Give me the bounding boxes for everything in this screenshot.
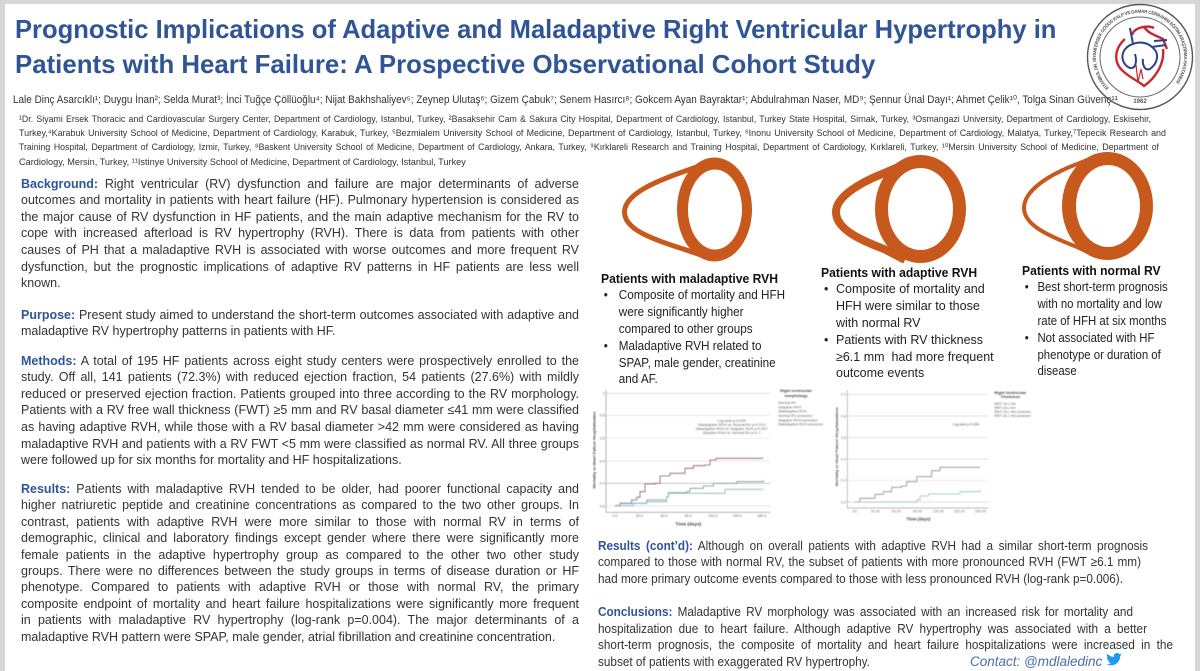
chart: RV thickness survival curves: RWT ≥6.1 mm-censored (994, 414, 1031, 418)
panel: patients with maladaptive RVH: • (604, 339, 608, 353)
chart: morphology survival curves: 30.0 (636, 514, 643, 518)
chart: morphology survival curves: Normal RV-censored (778, 414, 812, 418)
chart: morphology survival curves: 1 (603, 392, 605, 396)
panel: background: known. (21, 276, 61, 290)
panel: conclusions: subset of patients with exaggerated RV hypertrophy. (598, 655, 870, 669)
chart: RV thickness survival curves (834, 390, 1032, 522)
panel: patients with maladaptive RVH: • (604, 288, 608, 302)
panel: conclusions (598, 605, 1173, 669)
panel: results continued: had more primary outcome events compared to those with less pronounced RVH (log-rank p=0.006). (598, 572, 1123, 586)
chart: morphology survival curves: Mortality or Heart Failure Hospitalization (591, 411, 596, 488)
panel: results continued: Results (cont’d): Although on overall patients with adaptive RVH had a similar short-term prognosis (598, 539, 1148, 553)
chart: RV thickness survival curves: 120.00 (933, 510, 944, 514)
panel: patients with maladaptive RVH: compared to other groups (619, 322, 753, 336)
chart: morphology survival curves: 180.0 (757, 514, 766, 518)
affiliations: ¹Dr. Siyami Ersek Thoracic and Cardiovascular Surgery Center, Department of Cardiology, Istanbul, Turkey, ²Basaksehir Cam & Sakura City Hospital, Department of Cardiology, Istanbul, Turkey State Hospital, Sirnak, Turkey, ³Osmangazi University, Department of Cardiology, Eskisehir, (19, 114, 1151, 125)
panel: patients with adaptive RVH: Composite of mortality and (836, 282, 985, 296)
chart: morphology survival curves: 60.0 (660, 514, 668, 518)
panel: patients with normal RV: Not associated with HF (1037, 331, 1154, 345)
panel: results: contrast, patients with adaptive RVH were more similar to those with normal RV in terms of (21, 515, 579, 529)
panel: methods: study. Off all, 141 patients (72.3%) with reduced ejection fraction, 54 patients (27.6%) with mildly (21, 370, 579, 384)
panel: purpose: Purpose: Present study aimed to understand the short-term outcomes associated with adaptive and (21, 308, 579, 322)
chart: RV thickness survival curves: 0.6 (841, 436, 846, 440)
chart: morphology survival curves: Log-rank p=0.004 (717, 419, 746, 423)
panel: background: causes of PH that a maladaptive RVH is associated with worse outcomes and more frequent RV (21, 243, 579, 257)
panel: methods: as having adaptive RVH, while those with a RV basal diameter >42 mm were considered as having (21, 420, 579, 434)
panel: patients with normal RV: • (1025, 280, 1029, 294)
chart: morphology survival curves: 150.0 (733, 514, 742, 518)
panel: patients with adaptive RVH: with normal RV (836, 316, 921, 330)
panel: patients with normal RV: Best short-term prognosis (1037, 280, 1168, 294)
chart: morphology survival curves: Time (days) (675, 521, 702, 526)
panel: patients with normal RV: phenotype or duration of (1037, 348, 1161, 362)
panel: methods: maladaptive RVH and patients with a RV FWT <5 mm were classified as normal RV. All three groups (21, 437, 579, 451)
chart: RV thickness survival curves: RWT <6.1 mm (994, 402, 1016, 406)
panel: patients with maladaptive RVH: and AF. (619, 372, 658, 386)
panel: patients with adaptive RVH: ≥6.1 mm had more frequent (836, 350, 994, 364)
title (15, 14, 1056, 79)
chart: RV thickness survival curves: 90.00 (913, 510, 922, 514)
panel: patients with maladaptive RVH: Composite of mortality and HFH (619, 288, 785, 302)
chart: morphology survival curves: 0.6 (600, 437, 605, 441)
chart: RV thickness survival curves: Time (days) (906, 516, 931, 521)
chart: RV thickness survival curves: Thickness (1001, 394, 1021, 399)
affiliations: Training Hospital, Department of Cardiology, Izmir, Turkey, ⁸Baskent University School of Medicine, Department of Cardiology, Ankara, Turkey, ⁹Kırklareli Research and Training Hospital, Department of Cardiology, Kırklareli, Turkey, ¹⁰Mersin University School of Medicine, Department of (19, 142, 1159, 153)
panel: purpose: maladaptive RV hypertrophy patterns in patients with HF. (21, 324, 336, 338)
affiliations: Turkey,⁴Karabuk University School of Medicine, Department of Cardiology, Karabuk, Turkey, ⁵Bezmialem University School of Medicine, Department of Cardiology, Istanbul, Turkey, ⁶Inonu University School of Medicine, Department of Cardiology, Malatya, Turkey,⁷Tepecik Research and (19, 128, 1166, 139)
panel: patients with adaptive RVH: outcome events (836, 366, 924, 380)
panel: methods: Patients with a RV free wall thickness (FWT) ≥5 mm and RV basal diameter ≤41 mm were classified (21, 403, 579, 417)
panel: conclusions: Conclusions: Maladaptive RV morphology was associated with an increased risk for mortality and (598, 605, 1133, 619)
chart: morphology survival curves (591, 388, 824, 528)
hospital logo (1086, 4, 1194, 110)
chart: morphology survival curves: morphology (784, 393, 808, 398)
chart: morphology survival curves: Adaptive RVH (778, 405, 802, 409)
panel: conclusions: hospitalization due to heart failure. Although adaptive RV hypertrophy was associated with a better (598, 622, 1147, 636)
chart: morphology survival curves: Maladaptive RVH (778, 410, 807, 414)
hospital logo: 1962 (1133, 99, 1147, 105)
affiliations: Cardiology, Mersin, Turkey, ¹¹Istinye University School of Medicine, Department of Cardiology, Istanbul, Turkey (19, 157, 466, 168)
panel: patients with adaptive RVH: Patients with RV thickness (836, 333, 983, 347)
panel: patients with maladaptive RVH: Patients with maladaptive RVH (601, 272, 778, 286)
panel: patients with normal RV: disease (1037, 364, 1077, 378)
chart: morphology survival curves: Adaptive RVH-censored (778, 418, 818, 422)
panel: results continued: compared to those with normal RV, the subset of patients with more pronounced RVH (FWT ≥6.1 mm) (598, 555, 1141, 569)
chart: RV thickness survival curves: 150.00 (954, 510, 965, 514)
icon: twitter bird (1106, 653, 1122, 666)
chart: RV thickness survival curves: RWT <6.1 mm-censored (994, 410, 1031, 414)
chart: RV thickness survival curves: 60.00 (892, 510, 901, 514)
chart: morphology survival curves: Maladaptive RVH-censored (778, 423, 823, 427)
authors: Lale Dinç Asarcıklı¹; Duygu İnan²; Selda Murat³; İnci Tuğçe Çöllüoğlu⁴; Nijat Bakhshaliyev⁵; Zeynep Ulutaş⁶; Gizem Çabuk⁷; Senem Hasırcı⁸; Gokcem Ayan Bayraktar¹; Abdulrahman Naser, MD⁹; Şennur Ünal Dayı¹; Ahmet Çelik¹⁰, Tolga Sinan Güvenç¹¹ (13, 94, 1118, 106)
chart: RV thickness survival curves: 30.00 (871, 510, 880, 514)
panel: background: dysfunction, but the prognostic implications of adaptive RV patterns in HF patients are less well (21, 260, 579, 274)
panel: patients with adaptive RVH: HFH were similar to those (836, 299, 980, 313)
chart: RV thickness survival curves: Mortality or Heart Failure Hospitalizations (834, 406, 839, 486)
chart: morphology survival curves: 0.4 (600, 459, 605, 463)
chart: morphology survival curves: 0.2 (600, 482, 605, 486)
panel: background: cope with increased afterload is RV hypertrophy (RVH). There is data from patients with other (21, 226, 579, 240)
chart: RV thickness survival curves: 0.8 (841, 414, 846, 418)
panel: results: groups. There were no differences between the study groups in terms of disease duration or HF (21, 564, 579, 578)
panel: patients with adaptive RVH: • (824, 282, 828, 296)
panel: background (21, 177, 579, 290)
chart: morphology survival curves: Maladaptive RVH vs. Normal RV p=0.013 (698, 423, 765, 427)
title: Patients with Heart Failure: A Prospective Observational Cohort Study (15, 49, 875, 79)
panel: methods: were followed up for six months for mortality and HF hospitalizations. (21, 453, 402, 467)
hospital logo: İSTANBUL DR. SİYAMİ ERSEK GÖĞÜS KALP VE DAMAR CERRAHİSİ EĞİTİM ARAŞTIRMA HASTANESİ (1092, 10, 1188, 90)
panel: patients with maladaptive RVH: Maladaptive RVH related to (619, 339, 761, 353)
panel: results continued (598, 539, 1148, 586)
panel: results: Results: Patients with maladaptive RVH tended to be older, had poorer functional capacity and (21, 482, 579, 496)
chart: morphology survival curves: Adaptive RVH vs. Normal RV p=0.7 (703, 431, 761, 435)
panel: patients with adaptive RVH: Patients with adaptive RVH (821, 266, 977, 280)
chart: morphology survival curves: 0.8 (600, 414, 605, 418)
panel: results: demographic, clinical and laboratory findings except gender where there were significantly more (21, 531, 579, 545)
panel: patients with maladaptive RVH: SPAP, male gender, creatinine (619, 356, 776, 370)
chart: RV thickness survival curves: Right Ventricular (994, 390, 1027, 395)
panel: methods (21, 354, 579, 467)
chart: morphology survival curves: 90.0 (685, 514, 692, 518)
chart: RV thickness survival curves: 0.2 (841, 479, 846, 483)
chart: morphology survival curves: Normal RV (778, 401, 797, 405)
chart: RV thickness survival curves: 1.0 (841, 393, 846, 397)
icon: maladaptive RV heart diagram (622, 158, 752, 262)
chart: RV thickness survival curves: Log-rank p=0.006 (953, 422, 979, 426)
panel: background: outcomes and mortality in patients with heart failure (HF). Pulmonary hypertension is considered as (21, 193, 579, 207)
panel: methods: Methods: A total of 195 HF patients across eight study centers were prospectively enrolled to the (21, 354, 579, 368)
panel: patients with maladaptive RVH: were significantly higher (619, 305, 743, 319)
chart: morphology survival curves: 0.0 (612, 514, 618, 518)
panel: patients with normal RV: • (1025, 331, 1029, 345)
panel: results: maladaptive RVH pattern were SPAP, male gender, atrial fibrillation and creatinine concentration. (21, 630, 555, 644)
title: Prognostic Implications of Adaptive and Maladaptive Right Ventricular Hypertrophy in (15, 14, 1056, 44)
panel: patients with normal RV: with no mortality and low (1037, 297, 1162, 311)
icon: normal RV heart diagram (1022, 152, 1153, 260)
panel: patients with adaptive RVH (821, 266, 994, 380)
panel: purpose (21, 308, 579, 338)
panel: results: female patients in the adaptive hypertrophy group as compared to the other two other study (21, 548, 579, 562)
chart: morphology survival curves: 0.0 (600, 504, 605, 508)
chart: RV thickness survival curves: 0.0 (841, 500, 846, 504)
chart: morphology survival curves: Maladaptive RVH vs. Adaptive RVH p=0.007 (696, 427, 768, 431)
panel: results: phenotype. Compared to patients with adaptive RVH or those with normal RV, the primary (21, 580, 579, 594)
panel: results: composite endpoint of mortality and heart failure hospitalizations were significantly more frequent (21, 597, 579, 611)
panel: background: Background: Right ventricular (RV) dysfunction and failure are major determinants of adverse (21, 177, 579, 191)
panel: patients with normal RV: Patients with normal RV (1022, 264, 1161, 278)
chart: RV thickness survival curves: 180.00 (975, 510, 986, 514)
contact: Contact: @mdlaledinc (970, 654, 1102, 669)
panel: patients with adaptive RVH: • (824, 333, 828, 347)
chart: RV thickness survival curves: RWT ≥6.1 mm (994, 406, 1016, 410)
panel: results: higher natriuretic peptide and creatinine concentrations as compared to the two other groups. In (21, 498, 579, 512)
chart: RV thickness survival curves: .00 (852, 510, 857, 514)
panel: methods: reduced or preserved ejection fraction. Patients grouped into three according to the RV morphology. (21, 387, 579, 401)
chart: RV thickness survival curves: 0.4 (841, 457, 846, 461)
chart: morphology survival curves: Right ventricular (780, 388, 812, 393)
icon: adaptive RV heart diagram (832, 155, 966, 264)
panel: background: the major cause of RV dysfunction in HF patients, and the main adaptive mechanism for the RV to (21, 210, 579, 224)
panel: results: in patients with maladaptive RV hypertrophy (log-rank p=0.004). The major determinants of a (21, 613, 579, 627)
affiliations (19, 114, 1166, 168)
panel: patients with maladaptive RVH (601, 272, 785, 386)
panel: conclusions: short-term prognosis, the composite of mortality and heart failure hospitalizations were increased in the (598, 638, 1173, 652)
panel: patients with normal RV: rate of HFH at six months (1037, 314, 1166, 328)
panel: results (21, 482, 579, 644)
chart: morphology survival curves: 120.0 (708, 514, 717, 518)
panel: patients with normal RV (1022, 264, 1168, 378)
